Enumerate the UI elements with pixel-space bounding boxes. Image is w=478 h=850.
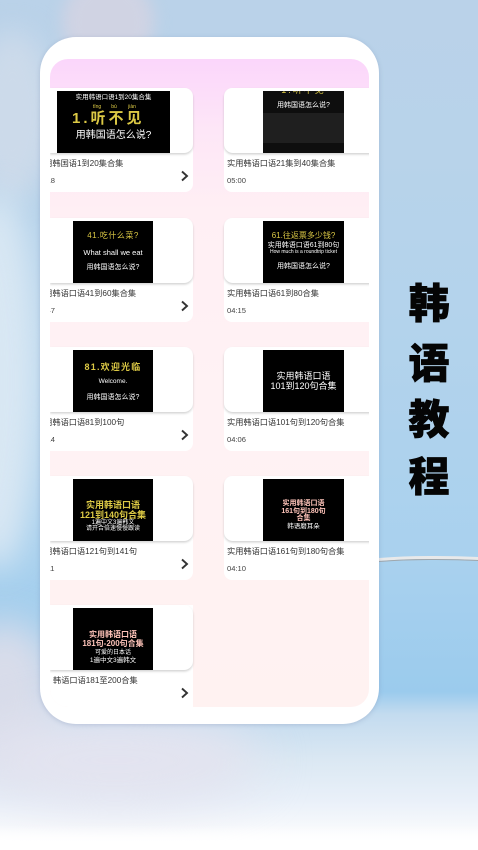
card: lesson 161-180: 实用韩语口语161句到180句合集	[227, 547, 344, 556]
card: lesson 21-40: 实用韩语口语21集到40集合集	[227, 159, 335, 168]
card: lesson 101-120	[224, 347, 384, 451]
thumbnail 1: 1.听不见	[72, 110, 145, 127]
thumbnail 4: 实用韩语口语61到80句	[268, 242, 339, 248]
thumbnail 1: jiàn	[128, 104, 136, 110]
thumbnail 1: 实用韩语口语1到20集合集	[76, 94, 151, 100]
heading: vertical title: 语	[408, 341, 450, 387]
thumbnail 6: 101到120句合集	[270, 380, 337, 390]
thumbnail 4: How much is a roundtrip ticket	[270, 249, 337, 255]
thumbnail 1: 用韩国语怎么说?	[76, 130, 151, 141]
thumbnail 9: 1遍中文3遍韩文	[90, 657, 136, 664]
video list	[50, 88, 369, 707]
thumbnail 8: 161句到180句	[281, 508, 326, 514]
card: lesson 21-40	[224, 88, 384, 192]
thumbnail 9: 可爱的日本话	[95, 650, 131, 656]
card: lesson 41-60	[50, 218, 193, 322]
heading: vertical title	[408, 281, 450, 500]
thumbnail 5	[73, 350, 153, 412]
phone frame	[40, 37, 379, 724]
card: lesson 21-40: 05:00	[227, 176, 246, 185]
card: lesson 101-120: 04:06	[227, 435, 246, 444]
thumbnail 7: 121到140句合集	[80, 510, 146, 520]
card: lesson 61-80: 04:15	[227, 306, 246, 315]
thumbnail 9: 181句-200句合集	[82, 639, 144, 648]
thumbnail 2: 用韩国语怎么说?	[277, 102, 330, 108]
thumbnail 9	[73, 608, 153, 670]
thumbnail 1	[57, 91, 170, 153]
thumbnail 4: 61.往返票多少钱?	[272, 231, 335, 240]
thumbnail 3	[73, 221, 153, 283]
thumbnail 7: 实用韩语口语	[86, 500, 140, 510]
card: lesson 121-140	[50, 476, 193, 580]
chevron	[181, 300, 188, 312]
thumbnail 4: 用韩国语怎么说?	[277, 262, 330, 270]
thumbnail 7: 请开合倍速慢慢跟读	[86, 526, 140, 532]
heading: vertical title: 程	[408, 454, 450, 500]
chevron	[181, 688, 188, 698]
card: lesson 81-100	[50, 347, 193, 451]
chevron	[181, 430, 188, 440]
heading: vertical title: 教	[408, 397, 450, 443]
thumbnail 3: What shall we eat	[83, 248, 143, 257]
card: lesson 1-20	[50, 88, 193, 192]
thumbnail 3: 41.吃什么菜?	[87, 231, 139, 240]
thumbnail 7	[73, 479, 153, 541]
card: lesson 181-200: 韩语口语181至200合集	[53, 676, 138, 685]
thumbnail 1: bù	[111, 104, 117, 110]
card: lesson 61-80	[224, 218, 384, 322]
thumbnail 8: 实用韩语口语	[282, 500, 324, 506]
thumbnail 8: 韩语磨耳朵	[287, 523, 320, 530]
card: lesson 161-180: 04:10	[227, 564, 246, 573]
wire in the sky	[379, 556, 478, 562]
card: lesson 161-180	[224, 476, 384, 580]
thumbnail 5: 81.欢迎光临	[85, 362, 141, 372]
thumbnail 8: 合集	[296, 514, 310, 522]
card: lesson 181-200	[50, 605, 193, 707]
thumbnail 1: tīng	[93, 104, 101, 110]
thumbnail 6	[263, 350, 344, 412]
heading: vertical title: 韩	[408, 281, 450, 327]
card: lesson 101-120: 实用韩语口语101句到120句合集	[227, 418, 344, 427]
thumbnail 3: 用韩国语怎么说?	[87, 264, 139, 270]
thumbnail 7: 1遍中文3遍韩文	[92, 520, 134, 526]
thumbnail 2	[263, 91, 344, 153]
thumbnail 6: 实用韩语口语	[276, 371, 330, 381]
app screen	[50, 59, 369, 707]
thumbnail 5: Welcome.	[99, 378, 127, 384]
card: lesson 61-80: 实用韩语口语61到80合集	[227, 289, 319, 298]
chevron	[181, 558, 188, 570]
chevron	[181, 170, 188, 182]
thumbnail 4	[263, 221, 344, 283]
thumbnail 9: 实用韩语口语	[89, 630, 137, 639]
thumbnail 8	[263, 479, 344, 541]
thumbnail 5: 用韩国语怎么说?	[87, 394, 139, 400]
